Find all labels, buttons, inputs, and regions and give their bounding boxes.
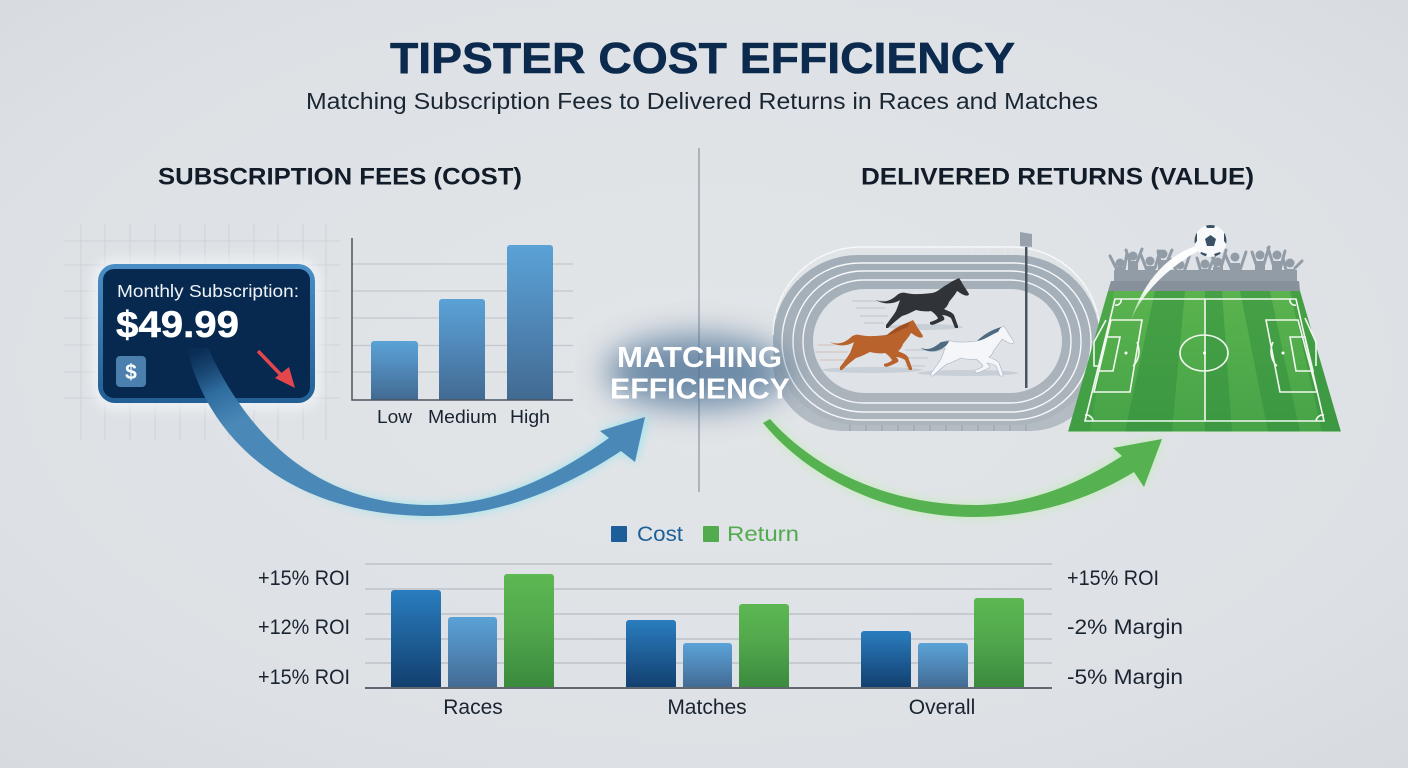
legend: [611, 523, 799, 546]
right axis labels: -2% Margin: [1067, 616, 1183, 639]
group: matches: [626, 604, 789, 688]
icon: red down arrow: [258, 351, 295, 388]
bar: high: [507, 245, 553, 400]
title: TIPSTER COST EFFICIENCY: [390, 35, 1015, 83]
lane lines: [782, 263, 1091, 420]
arrow: cost to efficiency: [187, 348, 648, 516]
bar chart: fee tiers: [352, 238, 573, 427]
bar: low: [371, 341, 418, 400]
legend: cost: Cost: [637, 523, 683, 546]
pitch spots: [1124, 352, 1284, 354]
icon: dollar badge: [116, 356, 146, 387]
horse: white: [921, 326, 1014, 376]
panel: subscription card: [92, 258, 321, 410]
right axis labels: -5% Margin: [1067, 666, 1183, 689]
category labels: Races: [443, 696, 503, 719]
label: matching efficiency: MATCHING: [617, 342, 782, 374]
category labels: Matches: [667, 696, 747, 719]
card price: $49.99: [116, 304, 239, 345]
outer rail: [773, 247, 1100, 335]
group: races: [391, 574, 554, 688]
label: low: Low: [377, 407, 413, 427]
ball trail: [1131, 246, 1198, 320]
category labels: [443, 696, 975, 719]
label: matching efficiency: [610, 342, 790, 406]
track front wall: [773, 290, 1100, 431]
card label: Monthly Subscription:: [117, 281, 299, 301]
label: matching efficiency: EFFICIENCY: [610, 374, 790, 406]
horse: brown: [830, 320, 923, 370]
category labels: Overall: [909, 696, 975, 719]
illustration: soccer pitch: [1068, 281, 1341, 432]
pitch stripes: [1068, 291, 1341, 432]
track surface: [773, 255, 1100, 425]
stand band: [1108, 281, 1300, 291]
label: high: High: [510, 407, 550, 427]
heading: delivered returns: DELIVERED RETURNS (VALUE): [861, 164, 1254, 190]
legend: return: [703, 523, 799, 546]
pitch surface: [1068, 291, 1341, 432]
heading: subscription fees: SUBSCRIPTION FEES (COST): [158, 164, 522, 190]
icon: dollar badge: $: [125, 361, 137, 384]
left axis labels: [258, 567, 350, 689]
grouped bar chart: [258, 564, 1183, 719]
finish post: [1025, 247, 1028, 388]
legend: cost: [611, 523, 683, 546]
left axis labels: +12% ROI: [258, 616, 350, 639]
left axis labels: +15% ROI: [258, 666, 350, 689]
pitch markings: [1085, 299, 1324, 421]
flag: [1020, 232, 1032, 247]
right axis labels: [1067, 567, 1183, 689]
illustration: crowd: [1110, 247, 1302, 281]
illustration: race track: [773, 232, 1100, 431]
arrow: returns to pitch: [763, 419, 1162, 517]
icon: soccer ball: [1194, 225, 1226, 257]
right axis labels: +15% ROI: [1067, 567, 1159, 590]
group: overall: [861, 598, 1024, 688]
bar: medium: [439, 299, 485, 400]
label: medium: Medium: [428, 407, 497, 427]
subtitle: Matching Subscription Fees to Delivered Returns in Races and Matches: [306, 88, 1098, 114]
horse: black: [876, 278, 969, 328]
legend: return: Return: [727, 523, 799, 546]
infield: [813, 289, 1062, 393]
left axis labels: +15% ROI: [258, 567, 350, 590]
center glow: [606, 336, 790, 408]
horse motion lines and shadows: [815, 301, 1018, 376]
